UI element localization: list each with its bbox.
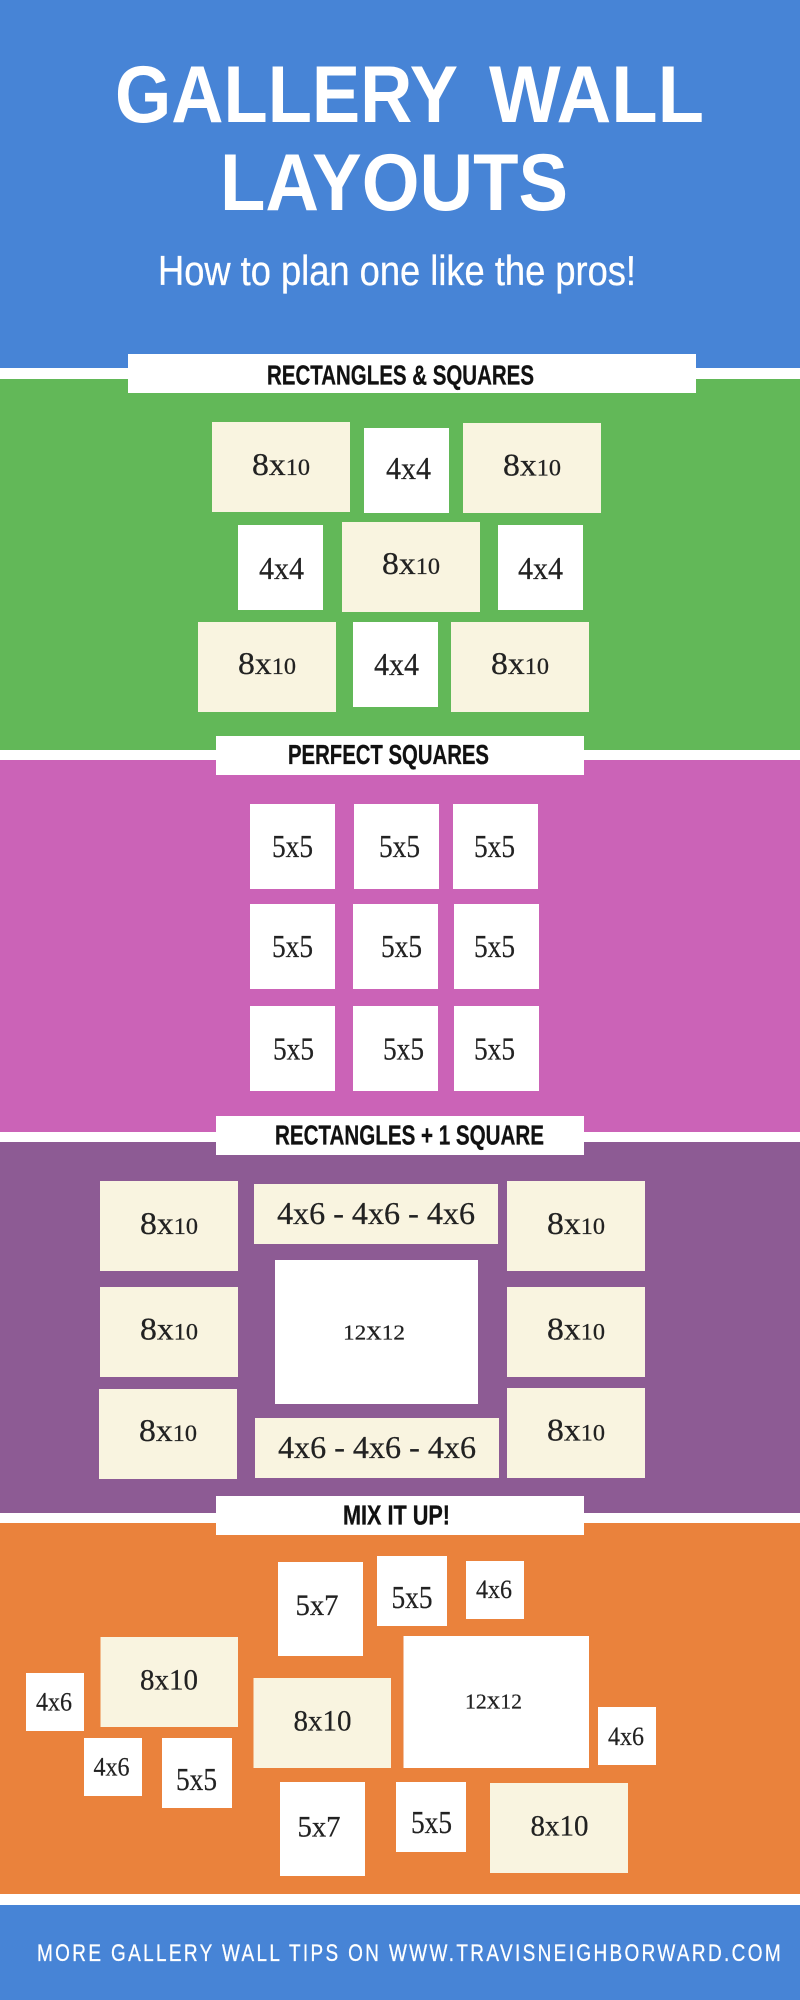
frame row 4x6 bottom [255, 1418, 499, 1478]
frame 5x5: 5x5 [273, 1030, 314, 1066]
frame 5x5 [454, 904, 539, 989]
frame 4x4 [353, 622, 438, 707]
heading: mix it up [216, 1496, 584, 1535]
frame 4x4: 4x4 [259, 550, 304, 586]
frame row 4x6 bottom: 4x6 - 4x6 - 4x6 [278, 1429, 476, 1465]
frame 5x5: 5x5 [379, 828, 420, 864]
frame 5x5: 5x5 [411, 1804, 452, 1840]
frame 5x5 [396, 1782, 466, 1852]
frame 8x10 [507, 1287, 645, 1377]
frame 4x4 [238, 525, 323, 610]
frame row 4x6 top: 4x6 - 4x6 - 4x6 [277, 1195, 475, 1231]
frame 8x10: 8x10 [547, 1205, 605, 1241]
frame 4x4 [364, 428, 449, 513]
panel: mix it up [0, 1523, 800, 1894]
frame 8x10: 8x10 [140, 1664, 198, 1696]
frame 4x6 [84, 1738, 142, 1796]
frame 5x5: 5x5 [474, 1030, 515, 1066]
frame 8x10 [463, 423, 601, 513]
frame 8x10 [507, 1388, 645, 1478]
frame 8x10: 8x10 [252, 446, 310, 482]
frame 5x5: 5x5 [474, 828, 515, 864]
frame 8x10 [212, 422, 350, 512]
frame 4x4: 4x4 [518, 550, 563, 586]
frame 12x12 [404, 1636, 589, 1768]
frame 8x10: 8x10 [530, 1810, 588, 1842]
heading: rectangles and squares: RECTANGLES & SQUARES [267, 360, 534, 390]
heading: mix it up: MIX IT UP! [343, 1500, 450, 1530]
frame 5x5 [162, 1738, 232, 1808]
title: LAYOUTS [220, 138, 568, 228]
heading: rectangles and squares [128, 354, 696, 393]
frame 5x5 [250, 904, 335, 989]
frame 8x10 [100, 1181, 238, 1271]
frame 8x10 [254, 1678, 391, 1768]
frame 12x12: 12x12 [465, 1686, 522, 1714]
frame row 4x6 top [254, 1184, 498, 1244]
frame 12x12 [275, 1260, 478, 1404]
frame 8x10: 8x10 [140, 1205, 198, 1241]
frame 4x4: 4x4 [386, 450, 431, 486]
frame 8x10 [100, 1637, 238, 1727]
frame 4x6: 4x6 [476, 1575, 512, 1604]
frame 8x10: 8x10 [491, 645, 549, 681]
frame 5x5 [250, 804, 335, 889]
frame 5x5: 5x5 [272, 928, 313, 964]
panel: perfect squares [0, 760, 800, 1132]
title: WALL [489, 50, 704, 140]
title [115, 50, 704, 228]
panel: rectangles plus one square [0, 1142, 800, 1513]
frame 4x6 [598, 1707, 656, 1765]
frame 8x10: 8x10 [139, 1412, 197, 1448]
frame 5x5: 5x5 [381, 928, 422, 964]
panel: rectangles and squares [0, 379, 800, 750]
frame 5x5 [354, 804, 439, 889]
frame 4x6 [466, 1561, 524, 1619]
heading: perfect squares [216, 736, 584, 775]
frame 5x7 [280, 1782, 365, 1876]
frame 5x7 [278, 1562, 363, 1656]
frame 4x6: 4x6 [608, 1722, 644, 1751]
frame 5x5 [453, 804, 538, 889]
frame 8x10: 8x10 [547, 1310, 605, 1346]
frame 4x4: 4x4 [374, 646, 419, 682]
frame 5x5: 5x5 [474, 928, 515, 964]
panel: footer [0, 1905, 800, 2000]
frame 5x5 [353, 1006, 438, 1091]
subtitle: How to plan one like the pros! [158, 247, 636, 294]
frame 4x6: 4x6 [36, 1688, 72, 1716]
frame 5x5 [353, 904, 438, 989]
frame 8x10: 8x10 [140, 1310, 198, 1346]
frame 8x10: 8x10 [238, 645, 296, 681]
title: GALLERY [115, 50, 458, 140]
frame 12x12: 12x12 [343, 1316, 405, 1346]
panel: header [0, 0, 800, 368]
frame 5x5: 5x5 [392, 1579, 432, 1615]
frame 5x5: 5x5 [272, 828, 313, 864]
frame 8x10: 8x10 [503, 446, 561, 482]
frame 8x10 [342, 522, 480, 612]
frame 8x10 [451, 622, 589, 712]
frame 8x10 [507, 1181, 645, 1271]
frame 8x10 [100, 1287, 238, 1377]
frame 5x5 [250, 1006, 335, 1091]
frame 5x5 [377, 1556, 447, 1626]
frame 4x4 [498, 525, 583, 610]
frame 8x10 [99, 1389, 237, 1479]
frame 4x6 [26, 1673, 84, 1731]
frame 5x7: 5x7 [298, 1810, 340, 1844]
frame 8x10 [490, 1783, 628, 1873]
frame 8x10: 8x10 [294, 1704, 352, 1738]
frame 8x10: 8x10 [382, 545, 440, 581]
heading: rectangles plus one square [216, 1116, 584, 1155]
heading: rectangles plus one square: RECTANGLES + 1 SQUARE [275, 1120, 544, 1150]
frame 5x5 [454, 1006, 539, 1091]
heading: perfect squares: PERFECT SQUARES [288, 739, 489, 770]
frame 5x5: 5x5 [176, 1761, 217, 1797]
frame 4x6: 4x6 [94, 1752, 130, 1782]
frame 8x10 [198, 622, 336, 712]
frame 8x10: 8x10 [547, 1412, 605, 1448]
frame 5x7: 5x7 [296, 1589, 338, 1622]
frame 5x5: 5x5 [383, 1030, 424, 1066]
